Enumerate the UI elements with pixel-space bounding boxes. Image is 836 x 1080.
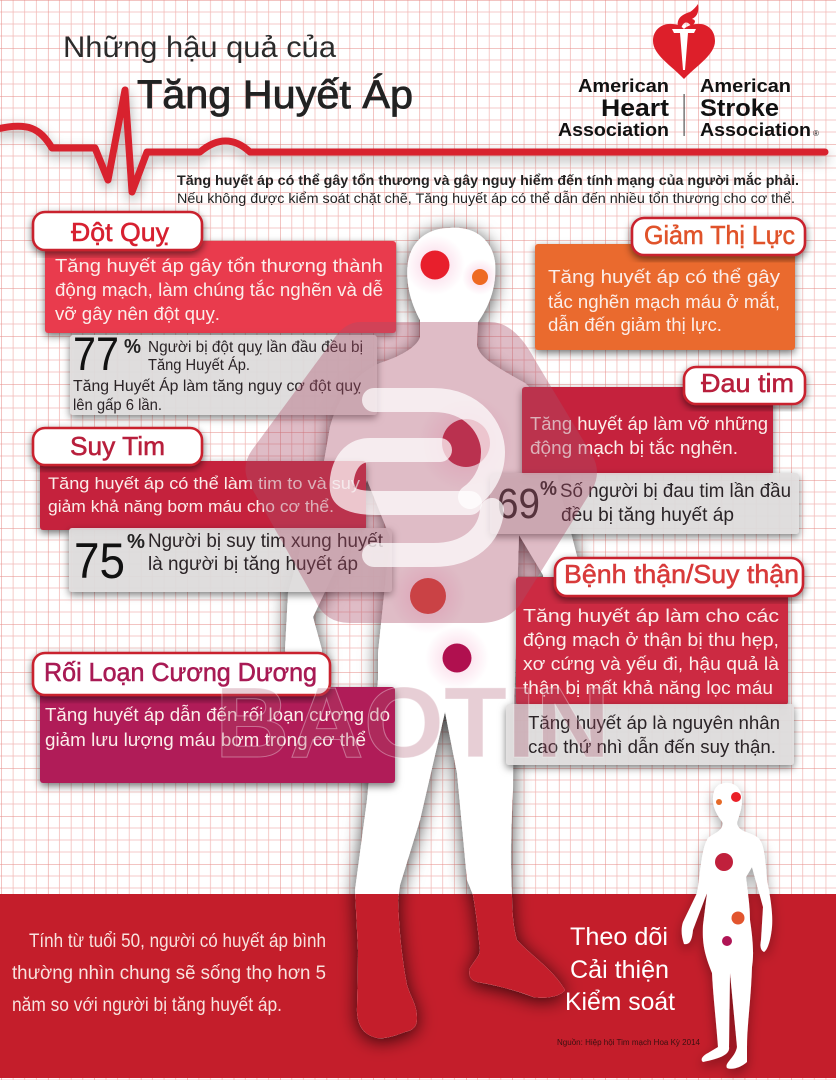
intro text: Nếu không được kiểm soát chặt chẽ, Tăng huyết áp có thể dẫn đến nhiều tổn thương cho cơ thể. bbox=[177, 191, 795, 206]
dot: reproductive bbox=[442, 644, 472, 672]
dot: heart bbox=[442, 419, 490, 467]
title: Những hậu quả của bbox=[63, 31, 336, 64]
panel: kidney disease: động mạch ở thận bị thu hẹp, bbox=[523, 630, 779, 650]
stat box: 75%: là người bị tăng huyết áp bbox=[148, 554, 358, 575]
logo: American Heart / Stroke Association: Stroke bbox=[700, 95, 779, 122]
panel: heart failure: Tăng huyết áp có thể làm tim to và suy bbox=[48, 474, 361, 493]
watermark: logo and BAOTIN bbox=[215, 322, 610, 779]
logo: American Heart / Stroke Association: American bbox=[700, 76, 791, 96]
logo: American Heart / Stroke Association: Heart bbox=[601, 95, 669, 122]
panel: erectile dysfunction: Tăng huyết áp dẫn đến rối loạn cương do bbox=[45, 704, 390, 725]
bottom left text: thường nhìn chung sẽ sống thọ hơn 5 bbox=[12, 963, 326, 984]
stat box: 77%: % bbox=[124, 336, 141, 358]
bottom call to action: Theo dõi bbox=[570, 923, 668, 951]
intro text bbox=[177, 173, 799, 206]
dot: vision bbox=[472, 269, 488, 285]
dot: stroke bbox=[420, 250, 450, 280]
logo: American Heart / Stroke Association: ® bbox=[813, 129, 819, 138]
source note: Nguồn: Hiệp hội Tim mạch Hoa Kỳ 2014 bbox=[557, 1038, 701, 1047]
title bbox=[63, 31, 413, 117]
dot: kidney bbox=[410, 578, 446, 614]
panel: erectile dysfunction bbox=[40, 687, 395, 783]
bottom left text: Tính từ tuổi 50, người có huyết áp bình bbox=[29, 931, 326, 952]
stat box: 69%: đều bị tăng huyết áp bbox=[561, 505, 734, 526]
bottom call to action bbox=[565, 923, 675, 1016]
panel: vision loss: tắc nghẽn mạch máu ở mắt, bbox=[548, 291, 780, 312]
figure: large body silhouette bbox=[285, 228, 590, 1054]
panel: kidney disease: xơ cứng và yếu đi, hậu quả là bbox=[523, 654, 780, 674]
dot: stroke bbox=[731, 792, 741, 802]
dot: kidney bbox=[732, 912, 744, 924]
watermark: logo and BAOTIN: BAOTIN bbox=[215, 667, 610, 779]
stat box: 77%: lên gấp 6 lần. bbox=[73, 397, 162, 414]
panel: heart failure bbox=[40, 461, 392, 592]
title: Tăng Huyết Áp bbox=[137, 72, 413, 117]
bottom left text: năm so với người bị tăng huyết áp. bbox=[12, 995, 282, 1016]
panel: stroke: vỡ gây nên đột quỵ. bbox=[55, 304, 220, 324]
heading: heart failure bbox=[33, 428, 202, 465]
panel: kidney disease bbox=[506, 577, 794, 765]
panel: bottom red band bbox=[0, 894, 836, 1078]
stat box: kidney failure bbox=[506, 704, 794, 765]
heading: erectile dysfunction: Rối Loạn Cương Dương bbox=[44, 657, 317, 687]
logo: American Heart / Stroke Association: American bbox=[578, 76, 669, 96]
panel: heart failure: giảm khả năng bơm máu cho cơ thể. bbox=[48, 497, 334, 516]
dot: reproductive bbox=[722, 936, 732, 946]
panel: vision loss: Tăng huyết áp có thể gây bbox=[548, 267, 780, 287]
panel: vision loss bbox=[535, 244, 795, 350]
heading: heart attack bbox=[684, 367, 805, 404]
stat box: 69%: 69 bbox=[497, 480, 540, 528]
bottom left text bbox=[12, 931, 326, 1016]
panel: stroke: Tăng huyết áp gây tổn thương thành bbox=[55, 256, 383, 276]
bottom call to action: Cải thiện bbox=[570, 956, 669, 984]
logo: American Heart / Stroke Association: Association bbox=[558, 120, 669, 140]
heading: stroke bbox=[33, 212, 202, 250]
stat box: 77% bbox=[70, 327, 377, 415]
stat box: kidney failure: Tăng huyết áp là nguyên nhân bbox=[528, 713, 780, 733]
ECG line bbox=[0, 90, 825, 192]
heading: vision loss: Giảm Thị Lực bbox=[644, 220, 795, 250]
logo: American Heart / Stroke Association: Association bbox=[700, 120, 811, 140]
dot: heart bbox=[715, 853, 733, 871]
stat box: 77%: 77 bbox=[73, 327, 119, 380]
heading: stroke: Đột Quỵ bbox=[71, 217, 169, 247]
stat box: 75%: 75 bbox=[74, 533, 125, 589]
panel: vision loss: dẫn đến giảm thị lực. bbox=[548, 314, 722, 335]
heading: kidney disease: Bệnh thận/Suy thận bbox=[564, 559, 799, 589]
panel: stroke bbox=[45, 241, 396, 415]
panel: heart attack bbox=[490, 387, 799, 534]
stat box: 69%: Số người bị đau tim lần đầu bbox=[560, 481, 791, 502]
panel: erectile dysfunction: giảm lưu lượng máu bơm trong cơ thể bbox=[45, 730, 366, 750]
heading: heart failure: Suy Tim bbox=[70, 431, 165, 461]
logo: American Heart / Stroke Association bbox=[558, 4, 819, 140]
stat box: 77%: Người bị đột quỵ lần đầu đều bị bbox=[148, 339, 363, 356]
dot: vision bbox=[716, 799, 722, 805]
stat box: 75% bbox=[69, 528, 392, 592]
stat box: 69%: % bbox=[540, 478, 557, 500]
icon: heart and torch bbox=[653, 4, 715, 79]
stat box: 75%: Người bị suy tim xung huyết bbox=[148, 531, 384, 552]
stat box: 75%: % bbox=[127, 531, 145, 553]
panel: kidney disease: thận bị mất khả năng lọc máu bbox=[523, 678, 773, 698]
panel: heart attack: Tăng huyết áp làm vỡ những bbox=[530, 414, 768, 434]
figure: small female silhouette bbox=[682, 783, 772, 1069]
stat box: 77%: Tăng Huyết Áp. bbox=[148, 357, 250, 374]
panel: stroke: động mạch, làm chúng tắc nghẽn và dễ bbox=[55, 279, 383, 300]
stat box: 77%: Tăng Huyết Áp làm tăng nguy cơ đột quỵ bbox=[73, 378, 361, 395]
bottom call to action: Kiểm soát bbox=[565, 988, 675, 1016]
panel: heart attack: động mạch bị tắc nghẽn. bbox=[530, 437, 738, 458]
stat box: kidney failure: cao thứ nhì dẫn đến suy thận. bbox=[528, 736, 776, 757]
intro text: Tăng huyết áp có thể gây tổn thương và gây nguy hiểm đến tính mạng của người mắc phải. bbox=[177, 173, 799, 188]
heading: heart attack: Đau tim bbox=[701, 368, 794, 398]
heading: erectile dysfunction bbox=[33, 653, 330, 695]
panel: kidney disease: Tăng huyết áp làm cho các bbox=[523, 606, 779, 626]
stat box: 69% bbox=[490, 473, 799, 534]
